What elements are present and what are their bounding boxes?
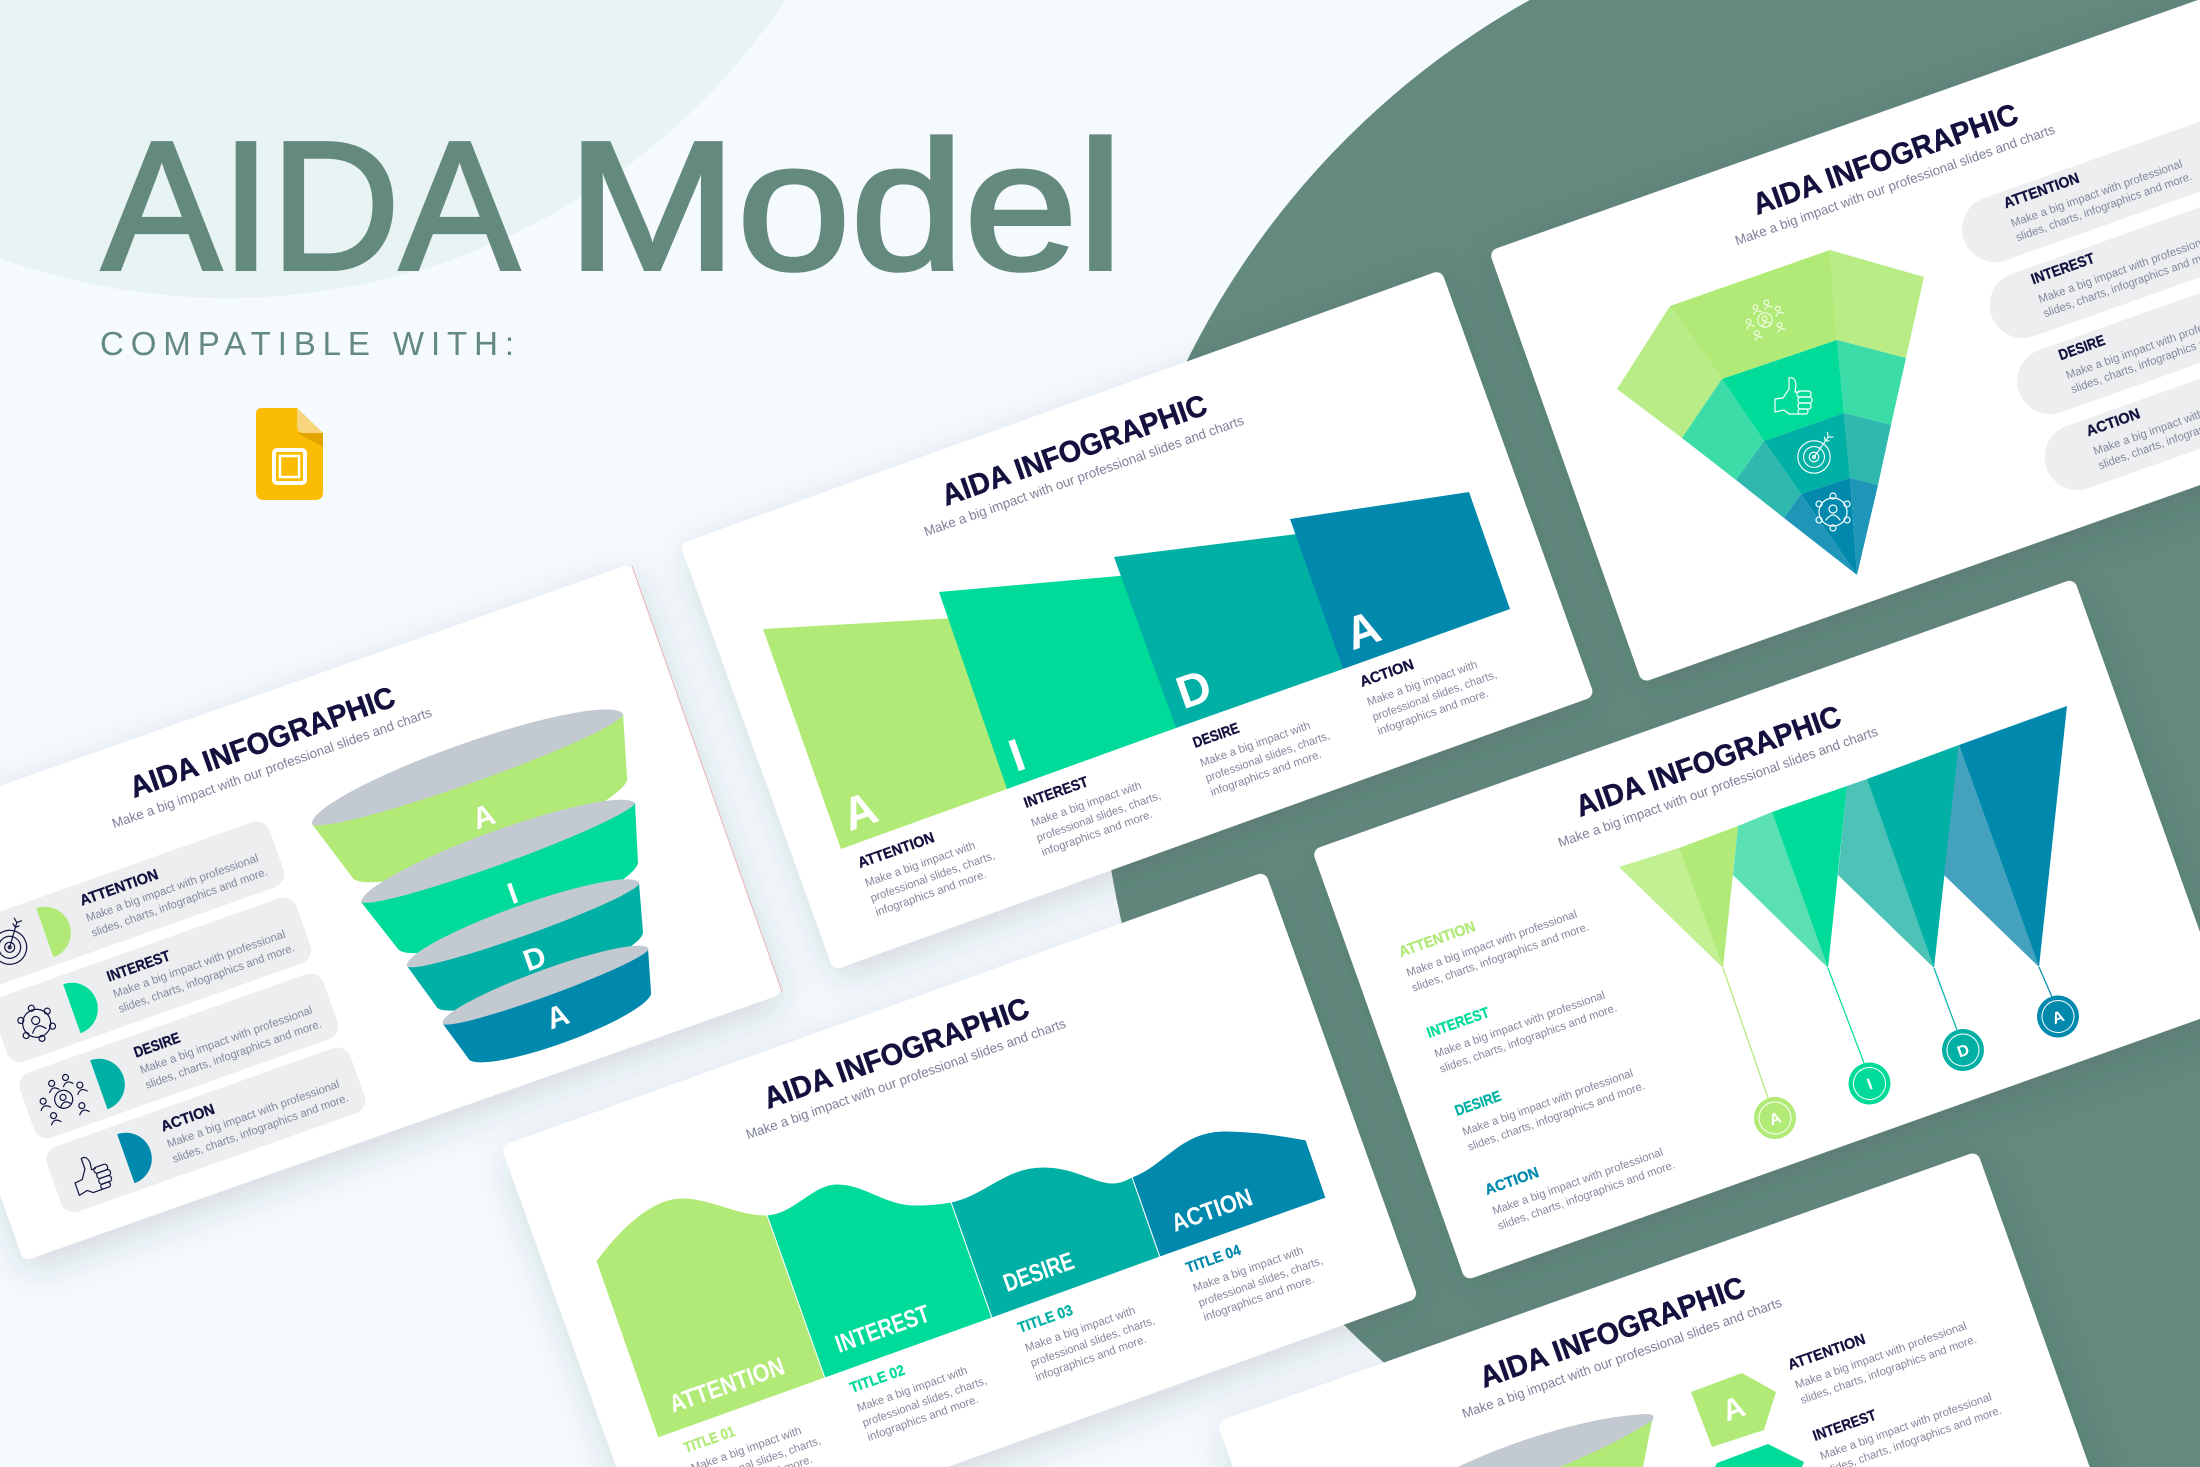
text: title 02: TITLE 02 <box>848 1362 907 1397</box>
card: desire <box>16 970 342 1142</box>
text: desire: slides, charts, infographics and more. <box>1466 1080 1647 1154</box>
funnel letters: A <box>468 798 500 836</box>
text: action: Make a big impact with <box>1366 659 1479 709</box>
hexagon I <box>1715 1444 1804 1467</box>
text: title 01 <box>682 1397 827 1467</box>
main title: AIDA <box>102 103 519 308</box>
text: interest <box>1425 964 1619 1076</box>
text: title 01: TITLE 01 <box>682 1423 737 1457</box>
text: title 04: professional slides, charts, <box>1197 1255 1325 1310</box>
wave labels: ATTENTION <box>666 1352 788 1419</box>
wave labels: INTEREST <box>832 1300 933 1359</box>
text: interest <box>1022 752 1167 859</box>
card: interest: Make a big impact with professional <box>112 929 287 1001</box>
pill: interest <box>1980 118 2200 347</box>
funnel chart <box>312 709 651 1062</box>
text: title 03: Make a big impact with <box>1024 1305 1137 1355</box>
funnel fragment <box>1458 1414 1653 1467</box>
badge A: A <box>1767 1109 1784 1129</box>
text: title 04 <box>1184 1217 1329 1324</box>
slide title: AIDA INFOGRAPHIC <box>1475 1271 1749 1395</box>
step chart <box>763 492 1510 849</box>
funnel letters: I <box>503 877 522 911</box>
triangle chart <box>1619 706 2067 1098</box>
text: desire <box>1191 692 1336 799</box>
badge I <box>1843 1057 1896 1110</box>
text: title 03: professional slides, charts, <box>1029 1315 1157 1370</box>
pill: desire <box>2008 194 2200 423</box>
text: desire: Make a big impact with <box>1199 720 1312 770</box>
badge A2: A <box>2050 1008 2067 1028</box>
text: action: Make a big impact with professional <box>1491 1147 1665 1218</box>
pill: attention: ATTENTION <box>2001 170 2082 212</box>
text: attention: Make a big impact with professional <box>1405 909 1579 980</box>
pill: interest: INTEREST <box>2029 250 2097 288</box>
text: interest: slides, charts, infographics and more. <box>1438 1002 1619 1076</box>
slide title: AIDA INFOGRAPHIC <box>759 992 1033 1116</box>
card: attention: Make a big impact with professional <box>85 853 260 925</box>
text: title 02: infographics and more. <box>866 1394 980 1444</box>
text: title 02: professional slides, charts, <box>861 1375 989 1430</box>
badge A <box>1748 1091 1802 1145</box>
slide title: AIDA INFOGRAPHIC <box>1748 98 2022 222</box>
slide title: Make a big impact with our professional slides and charts <box>1556 724 1880 850</box>
dark green circle <box>1100 0 2200 1467</box>
funnel letters <box>468 798 574 1036</box>
text: attention <box>1786 1296 1978 1407</box>
panel: bottom right slide <box>1217 1151 2129 1467</box>
text: action: infographics and more. <box>1376 688 1490 738</box>
panel: triangles slide <box>1312 579 2200 1281</box>
text: attention: ATTENTION <box>1397 918 1478 961</box>
text: title 04: Make a big impact with <box>1192 1245 1305 1295</box>
compatible with label: COMPATIBLE WITH: <box>100 325 514 362</box>
text: attention: slides, charts, infographics and more. <box>1799 1334 1978 1407</box>
text: interest: infographics and more. <box>1040 809 1154 859</box>
slide title: Make a big impact with our professional slides and charts <box>744 1016 1068 1142</box>
pale circle <box>0 0 898 298</box>
slide title: Make a big impact with our professional slides and charts <box>1460 1295 1784 1421</box>
text: attention: professional slides, charts, <box>869 850 997 905</box>
wave labels: ACTION <box>1168 1183 1256 1238</box>
pill: attention: Make a big impact with professional <box>2009 158 2184 230</box>
card: action <box>43 1044 369 1216</box>
pill: desire: DESIRE <box>2056 332 2107 364</box>
text: action <box>1358 631 1503 738</box>
icon: google slides <box>256 408 323 500</box>
step letters: D <box>1169 659 1218 719</box>
funnel letters: A <box>542 998 574 1036</box>
text: action <box>1483 1121 1677 1233</box>
step letters: A <box>1338 600 1387 660</box>
main title <box>102 103 1123 308</box>
card: interest: slides, charts, infographics and more. <box>117 942 296 1016</box>
panel: wave slide <box>501 872 1418 1467</box>
text: title 02: Make a big impact with <box>856 1365 969 1415</box>
text: attention: infographics and more. <box>874 869 988 919</box>
text: title 04: infographics and more. <box>1202 1274 1316 1324</box>
text: interest: INTEREST <box>1811 1407 1879 1445</box>
card: action: Make a big impact with professional <box>166 1079 341 1151</box>
text: desire: DESIRE <box>1191 720 1242 752</box>
card: attention <box>0 818 288 990</box>
text: title 03 <box>1016 1277 1161 1384</box>
funnel letters: D <box>519 940 551 978</box>
text: attention <box>1397 883 1591 995</box>
text: action: ACTION <box>1483 1164 1541 1199</box>
text: interest <box>1811 1367 2003 1467</box>
wave labels: DESIRE <box>1000 1247 1078 1298</box>
slide title: AIDA INFOGRAPHIC <box>937 389 1211 513</box>
panel: steps slide <box>680 270 1595 970</box>
badge A2 <box>2031 990 2085 1043</box>
card: action: ACTION <box>159 1101 217 1136</box>
text: title 03: infographics and more. <box>1034 1334 1148 1384</box>
card: desire: slides, charts, infographics and more. <box>144 1018 323 1092</box>
hexagon A: A <box>1718 1390 1750 1428</box>
slide title: AIDA INFOGRAPHIC <box>125 681 399 805</box>
text: attention <box>856 812 1001 919</box>
diamond chart <box>1617 250 1924 575</box>
text: action: slides, charts, infographics and more. <box>1496 1159 1677 1233</box>
slide title: Make a big impact with our professional slides and charts <box>110 705 434 831</box>
text: desire: DESIRE <box>1453 1088 1504 1120</box>
slide title: Make a big impact with our professional slides and charts <box>1733 122 2057 248</box>
pill: attention: slides, charts, infographics and more. <box>2014 171 2194 244</box>
wave chart <box>596 1131 1326 1438</box>
text: title 04: TITLE 04 <box>1184 1242 1244 1277</box>
text: desire: infographics and more. <box>1209 749 1323 799</box>
text: interest: Make a big impact with professional <box>1433 990 1607 1061</box>
panel: funnel slide <box>0 564 783 1261</box>
wave labels <box>666 1183 1256 1419</box>
text: attention: ATTENTION <box>1786 1331 1868 1374</box>
text: action: ACTION <box>1358 656 1416 691</box>
card: desire: Make a big impact with professional <box>139 1005 314 1077</box>
card: desire: DESIRE <box>132 1030 183 1062</box>
pill: attention <box>1953 42 2200 271</box>
text: interest: INTEREST <box>1425 1004 1492 1042</box>
text: attention: ATTENTION <box>856 829 937 872</box>
card: action: slides, charts, infographics and more. <box>171 1092 350 1166</box>
text: interest: Make a big impact with <box>1030 780 1143 830</box>
text: title 02 <box>848 1337 993 1444</box>
text: attention: Make a big impact with <box>864 840 977 890</box>
text: interest: Make a big impact with professional <box>1819 1391 1993 1463</box>
text: attention: Make a big impact with professional <box>1794 1320 1968 1392</box>
text: attention: slides, charts, infographics and more. <box>1410 921 1591 995</box>
text: title 03: TITLE 03 <box>1016 1302 1075 1337</box>
card: attention: slides, charts, infographics and more. <box>90 866 269 940</box>
hexagon A <box>1691 1373 1776 1447</box>
text: desire <box>1453 1042 1647 1154</box>
text: action: professional slides, charts, <box>1371 669 1499 724</box>
main title: Model <box>567 103 1123 308</box>
text: interest: professional slides, charts, <box>1035 790 1163 845</box>
card: interest: INTEREST <box>105 948 173 986</box>
card: interest <box>0 894 315 1066</box>
card: attention: ATTENTION <box>78 866 161 910</box>
slide title: Make a big impact with our professional slides and charts <box>922 413 1246 539</box>
step letters <box>835 600 1387 841</box>
slide title: AIDA INFOGRAPHIC <box>1571 700 1845 824</box>
badge D: D <box>1955 1041 1972 1061</box>
pill: action <box>2036 270 2200 499</box>
step letters: A <box>835 781 884 841</box>
badge I: I <box>1865 1076 1875 1094</box>
text: desire: professional slides, charts, <box>1204 730 1332 785</box>
pill: action: ACTION <box>2084 405 2142 440</box>
text: interest: INTEREST <box>1022 773 1091 812</box>
diamond icons <box>1740 296 1850 531</box>
step letters: I <box>1002 728 1031 782</box>
text: desire: Make a big impact with professional <box>1461 1068 1635 1139</box>
panel: diamond slide <box>1489 0 2200 683</box>
badge D <box>1936 1023 1990 1077</box>
